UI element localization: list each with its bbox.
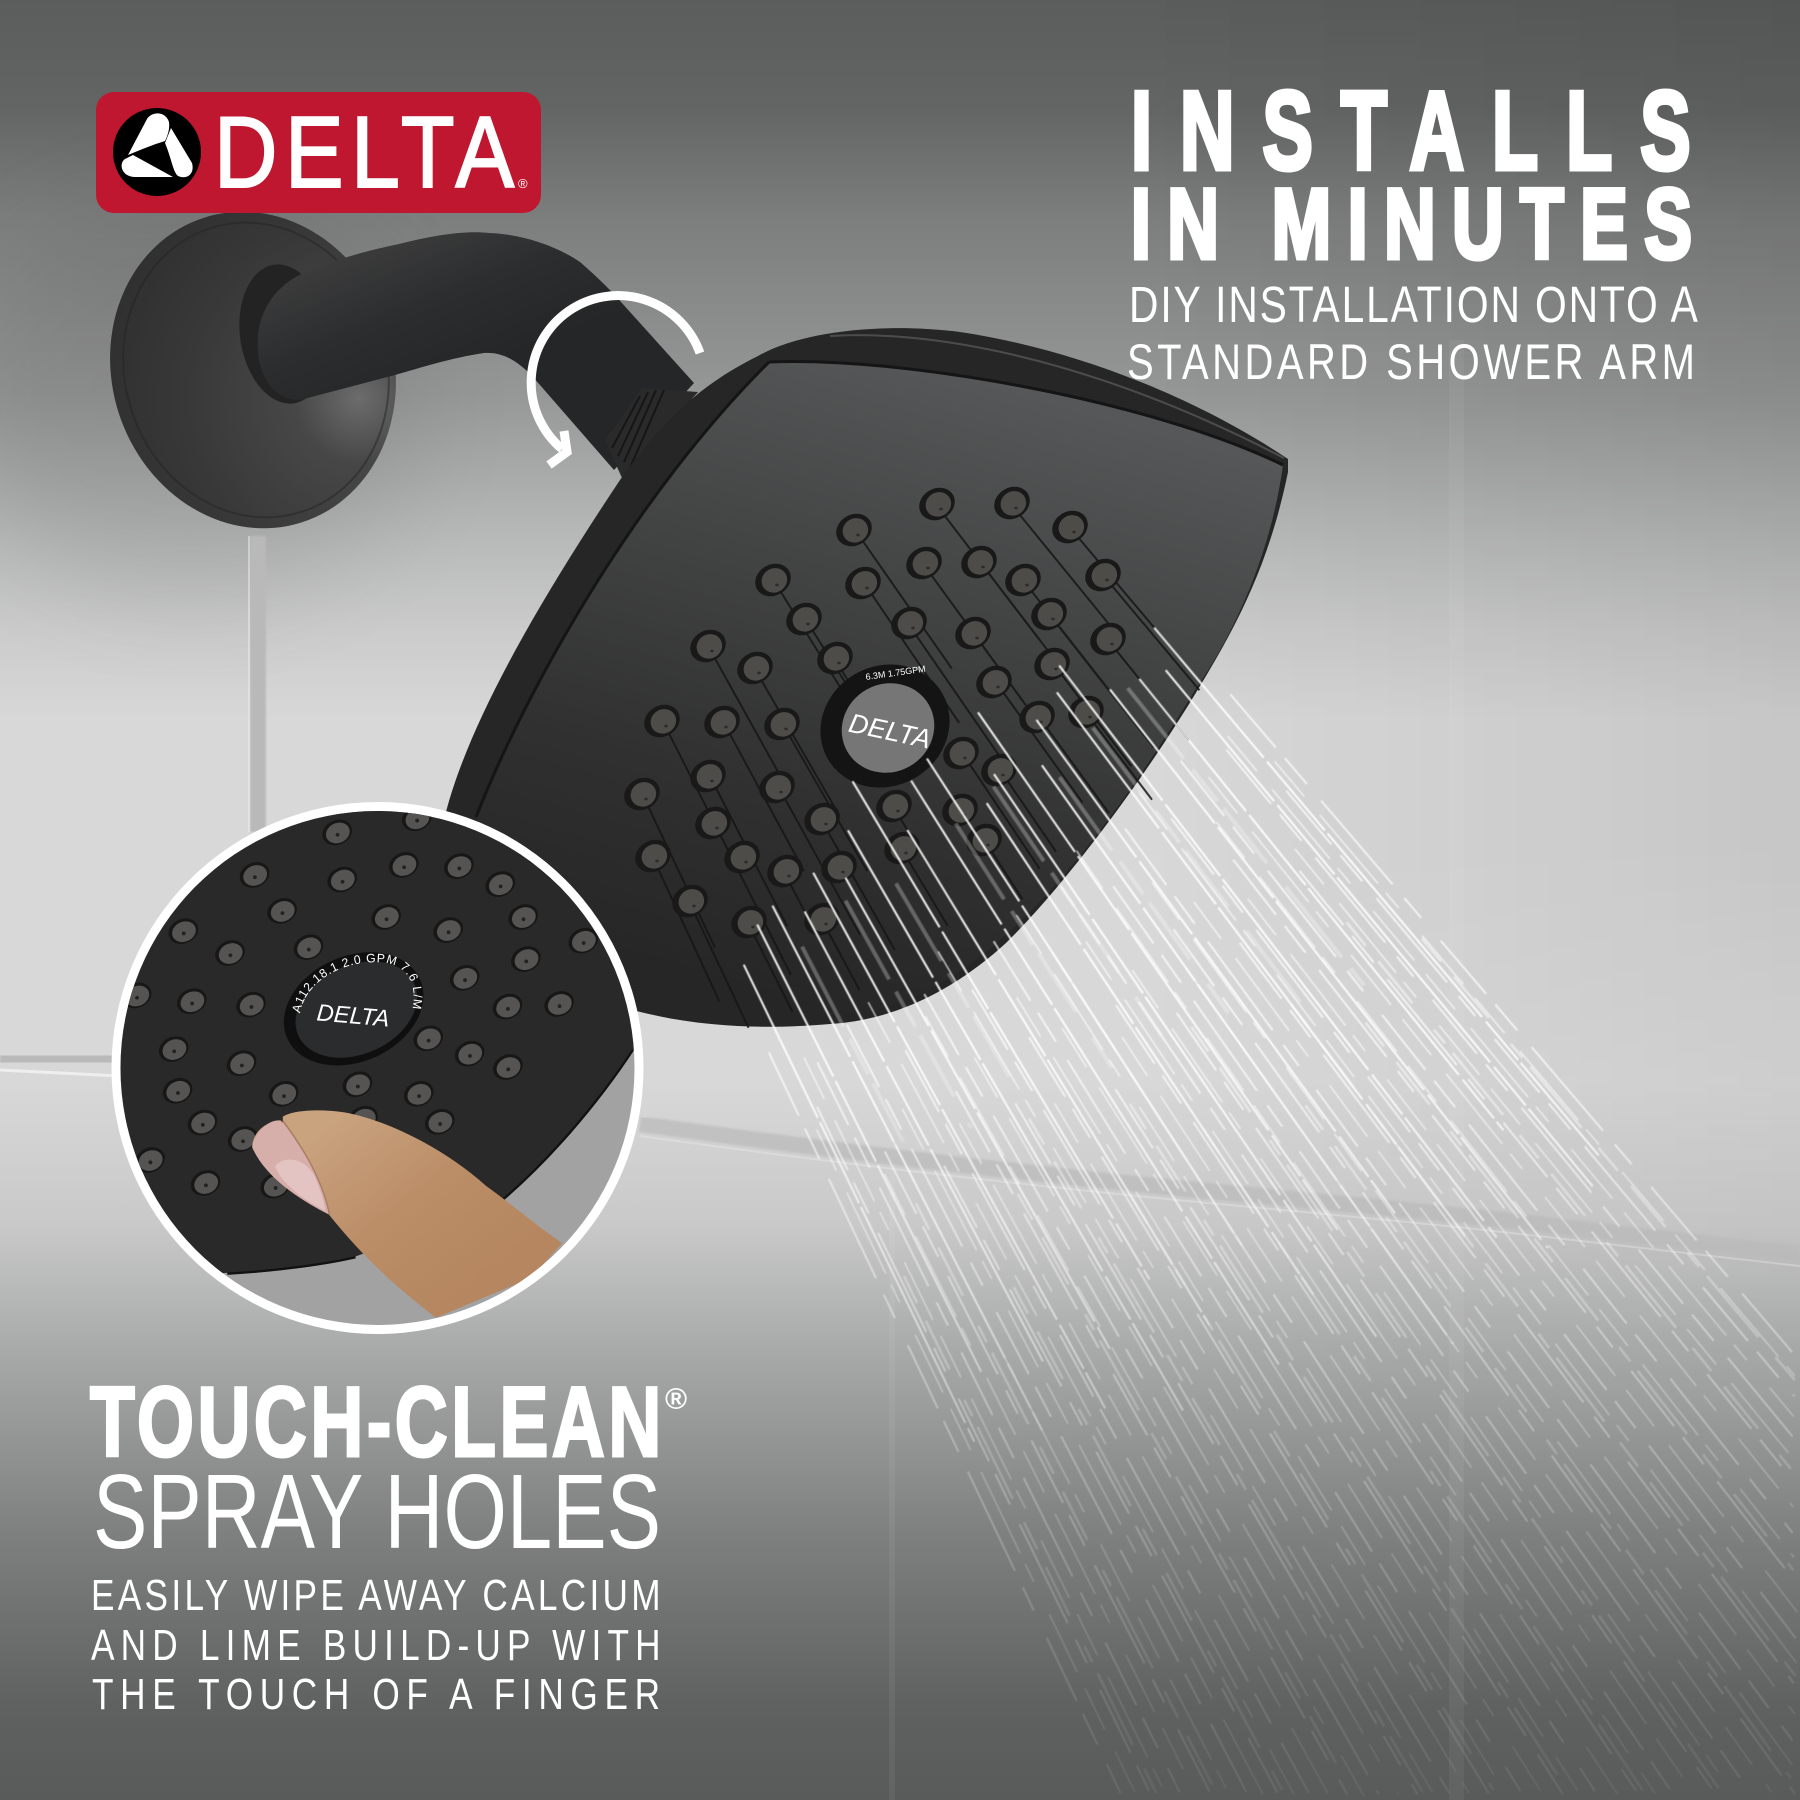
text: install description <box>1127 276 1698 390</box>
text: Touch-Clean description: AND LIME BUILD-UP WITH <box>91 1621 661 1670</box>
shower head <box>446 328 1288 1028</box>
icon: rotation arrow <box>531 296 700 465</box>
text: Touch-Clean description: THE TOUCH OF A FINGER <box>92 1670 660 1719</box>
logo: Delta badge: ® <box>518 176 528 191</box>
heading: Touch-Clean spray holes: SPRAY HOLES <box>93 1453 661 1571</box>
finger <box>252 1110 562 1318</box>
heading: Touch-Clean spray holes <box>90 1367 687 1571</box>
water spray <box>744 628 1797 1796</box>
shower arm and wall flange <box>69 174 698 566</box>
logo: Delta badge <box>96 92 541 213</box>
text: Touch-Clean description <box>91 1571 661 1719</box>
callout spray holes <box>118 801 602 1203</box>
heading: installs in minutes <box>1131 70 1692 280</box>
logo: Delta badge: DELTA <box>214 96 514 209</box>
spray holes <box>618 480 1132 945</box>
centre button on shower head: 6.3M 1.75GPM <box>865 664 926 682</box>
text: Touch-Clean description: EASILY WIPE AWAY CALCIUM <box>91 1571 661 1620</box>
heading: installs in minutes: INSTALLS <box>1131 70 1691 194</box>
callout centre button: A112.18.1 2.0 GPM 7.6 L/M <box>292 954 423 1014</box>
heading: Touch-Clean spray holes: ® <box>665 1383 687 1416</box>
text: install description: STANDARD SHOWER ARM <box>1127 334 1695 390</box>
centre button on shower head <box>798 641 972 811</box>
callout centre button: DELTA <box>316 1000 391 1033</box>
callout centre button <box>284 952 424 1066</box>
centre button on shower head: DELTA <box>846 708 934 755</box>
callout: finger wiping spray holes <box>112 802 644 1334</box>
heading: Touch-Clean spray holes: TOUCH-CLEAN <box>90 1367 661 1478</box>
spray hole trails <box>642 504 1199 1028</box>
text: install description: DIY INSTALLATION ONTO A <box>1129 276 1698 333</box>
heading: installs in minutes: IN MINUTES <box>1131 170 1692 280</box>
